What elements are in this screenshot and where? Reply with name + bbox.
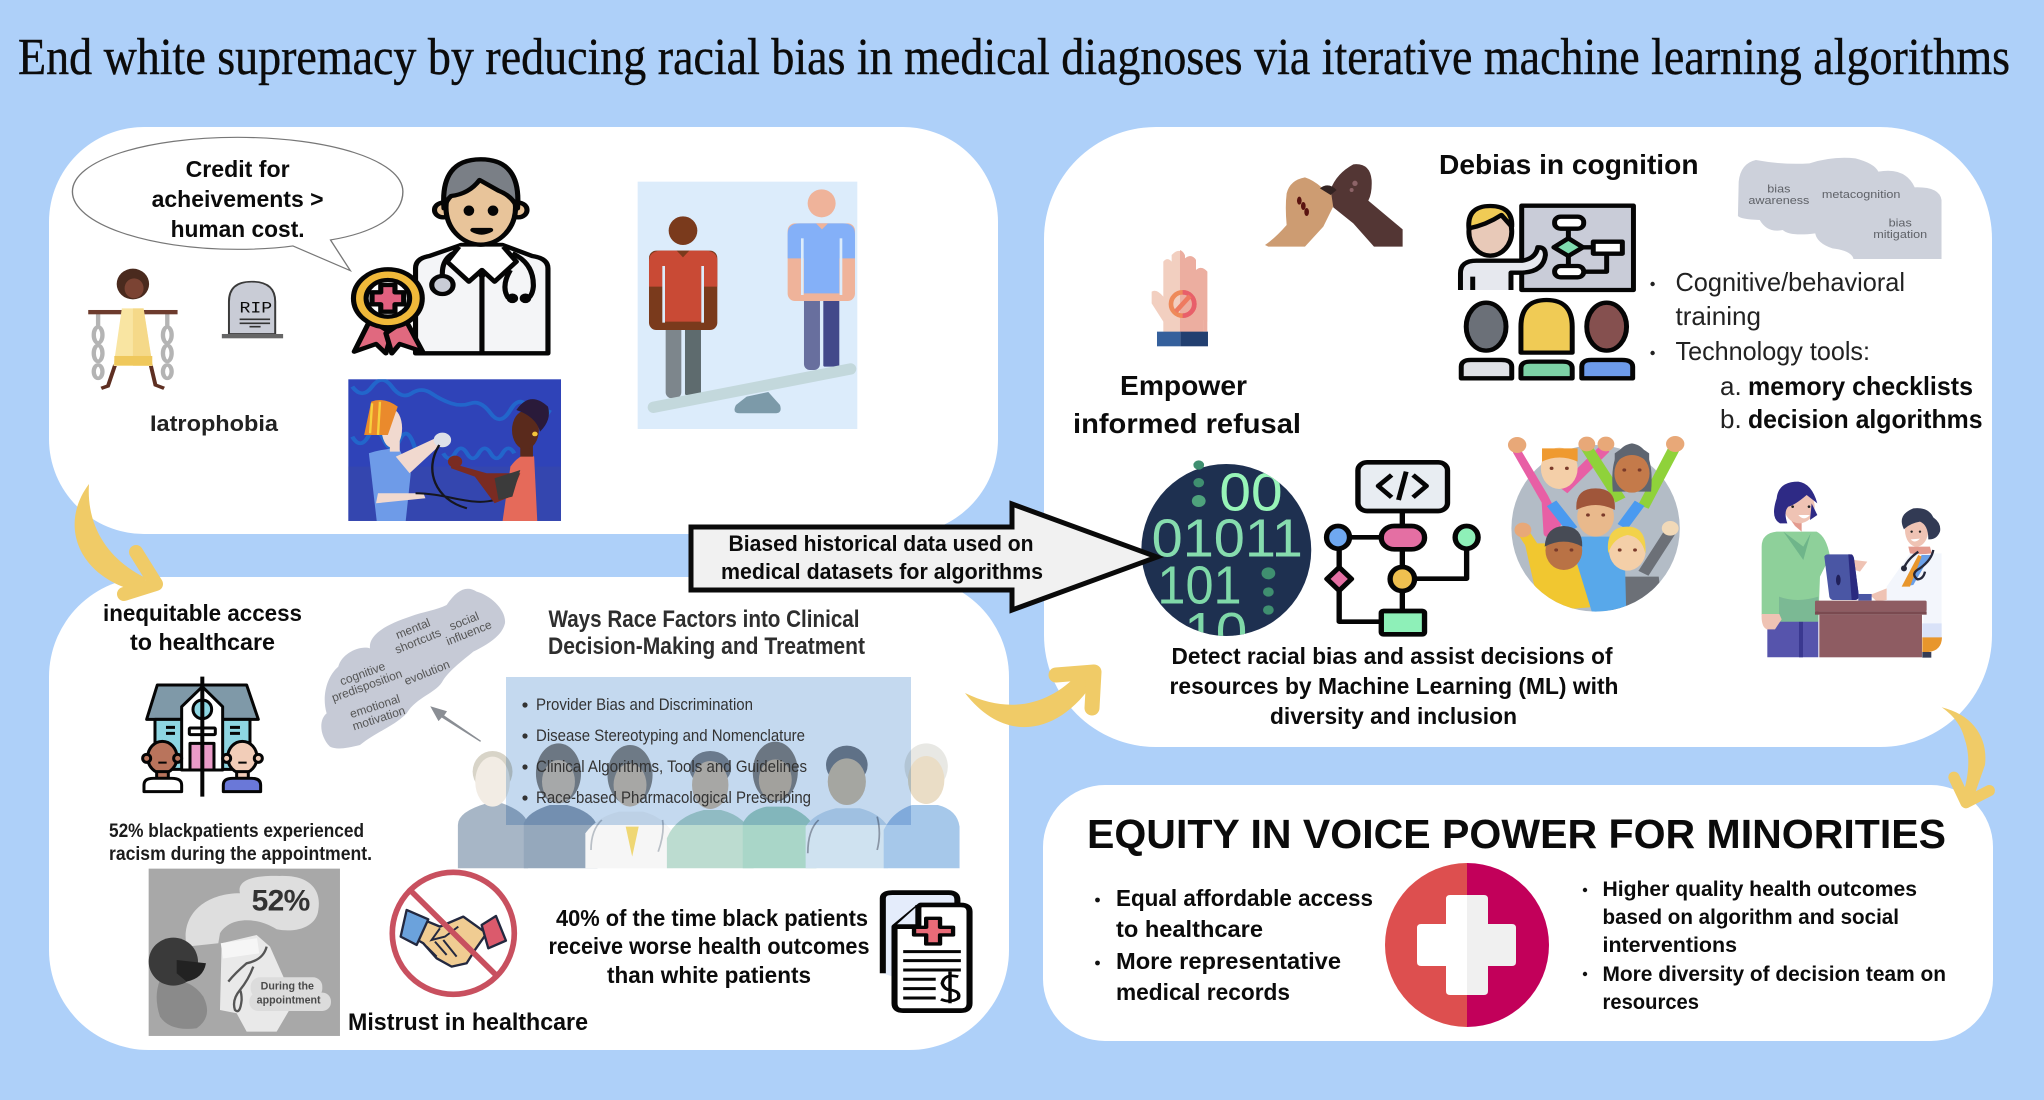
list: race factors: Provider Bias and Discrimination — [536, 696, 753, 714]
list: outcomes and diversity: interventions — [1602, 934, 1737, 957]
heading: debias in cognition: Debias in cognition — [1439, 149, 1698, 180]
word cloud: debiasing concepts: bias — [1767, 182, 1791, 195]
word cloud: cognitive factors — [321, 589, 505, 748]
word cloud: cognitive factors: cognitive — [338, 659, 387, 688]
heading: equity in voice power: EQUITY IN VOICE POWER FOR MINORITIES — [1087, 811, 1946, 857]
panel: inequitable care — [49, 577, 1009, 1050]
caption: detect racial bias: diversity and inclusion — [1270, 703, 1517, 729]
arrow: yellow to machine learning — [965, 672, 1095, 727]
word cloud: debiasing concepts: bias — [1889, 216, 1912, 229]
icon: binary code circle: 101 — [1157, 556, 1242, 615]
list: debias methods: Cognitive/behavioral — [1676, 267, 1905, 297]
speech bubble text: human cost. — [171, 216, 305, 242]
icon: divided hospital with two patients — [143, 677, 262, 797]
word cloud: cognitive factors: shortcuts — [393, 625, 443, 657]
icon: enslaved woman in chains — [88, 269, 178, 388]
list: debias methods: training — [1676, 301, 1761, 331]
icon: algorithm flowchart — [1327, 462, 1478, 634]
stat: 52 percent racism — [109, 820, 372, 865]
icon: presenter teaching audience flowchart — [1460, 206, 1633, 378]
list: race factors — [522, 696, 811, 807]
stat: 40 percent worse outcomes — [548, 905, 870, 988]
panel: historical harm — [49, 127, 998, 534]
label: Iatrophobia: Iatrophobia — [150, 411, 279, 436]
heading: empower informed refusal: informed refusal — [1073, 408, 1301, 439]
speech bubble text: Credit for — [186, 156, 290, 182]
list: access and records — [1095, 885, 1373, 1005]
speech bubble — [72, 137, 403, 271]
arrow: yellow to inequitable access — [75, 484, 156, 594]
heading: ways race factors: Ways Race Factors into Clinical — [548, 606, 860, 633]
word cloud: cognitive factors: evolution — [402, 657, 452, 688]
icon: doctor with award — [353, 159, 548, 353]
icon: binary code circle: 10 — [1184, 603, 1247, 662]
list: debias methods: a. — [1720, 371, 1742, 401]
list: access and records: medical records — [1116, 979, 1290, 1005]
word cloud: debiasing concepts — [1738, 158, 1942, 259]
list: outcomes and diversity: resources — [1602, 991, 1699, 1014]
arrow: biased historical data: medical datasets for algorithms — [721, 559, 1043, 584]
stat: 40 percent worse outcomes: than white patients — [607, 962, 811, 988]
list: debias methods — [1650, 267, 1982, 434]
panel: equity in voice power — [1043, 785, 1993, 1041]
arrow: gray pointer to cloud — [432, 707, 481, 741]
list: debias methods: memory checklists — [1748, 371, 1973, 401]
heading: inequitable access: to healthcare — [130, 629, 275, 655]
word cloud: cognitive factors: social — [447, 609, 481, 633]
heading: inequitable access — [103, 600, 302, 655]
heading: empower informed refusal — [1073, 370, 1301, 439]
icon: hand with no sign — [1152, 250, 1208, 346]
image: seesaw with unequal figures — [638, 182, 857, 429]
icon: diverse cheering crowd — [1508, 436, 1684, 612]
list: outcomes and diversity: based on algorithm and social — [1602, 906, 1899, 929]
word cloud: debiasing concepts: mitigation — [1873, 228, 1927, 241]
label: mistrust in healthcare: Mistrust in healthcare — [348, 1009, 588, 1036]
illustration: patient and doctor at desk — [1762, 482, 1942, 658]
caption: detect racial bias: Detect racial bias and assist decisions of — [1172, 643, 1613, 669]
icon: no handshake — [392, 872, 514, 994]
list: debias methods: Technology tools: — [1676, 336, 1870, 366]
word cloud: cognitive factors: motivation — [351, 703, 407, 733]
image: 52 percent during the appointment: appointment — [257, 994, 321, 1006]
image: 52 percent during the appointment — [149, 869, 340, 1036]
word cloud: cognitive factors: influence — [444, 617, 494, 648]
list: race factors: Disease Stereotyping and Nomenclature — [536, 727, 805, 745]
list: debias methods: b. — [1720, 404, 1742, 434]
icon: tombstone RIP: RIP — [239, 301, 272, 318]
word cloud: cognitive factors: emotional — [348, 692, 402, 721]
arrow: yellow to equity — [1942, 707, 1989, 803]
heading: inequitable access: inequitable access — [103, 600, 302, 626]
icon: tombstone RIP — [222, 282, 283, 338]
list: race factors: Clinical Algorithms, Tools and Guidelines — [536, 758, 807, 776]
speech bubble text: acheivements > — [152, 186, 324, 212]
list: access and records: to healthcare — [1116, 916, 1263, 942]
list: outcomes and diversity: More diversity of decision team on — [1602, 963, 1946, 986]
arrow: biased historical data: Biased historical data used on — [728, 531, 1034, 556]
panel: race factors list background — [506, 677, 911, 825]
list: race factors: Race-based Pharmacological Prescribing — [536, 789, 811, 807]
stat: 40 percent worse outcomes: receive worse health outcomes — [548, 933, 870, 959]
icon: binary code circle — [1141, 460, 1312, 636]
list: outcomes and diversity: Higher quality health outcomes — [1602, 878, 1917, 901]
image: nurse taking patient blood pressure — [348, 379, 561, 522]
image: 52 percent during the appointment: During the — [261, 980, 314, 992]
image: 52 percent during the appointment: 52% — [252, 885, 310, 918]
caption: detect racial bias: resources by Machine Learning (ML) with — [1170, 673, 1618, 699]
list: debias methods: decision algorithms — [1748, 404, 1982, 434]
caption: detect racial bias — [1170, 643, 1618, 729]
word cloud: debiasing concepts: awareness — [1748, 194, 1809, 207]
icon: binary code circle: 00 — [1219, 463, 1283, 523]
icon: pinky promise hands — [1265, 164, 1403, 247]
heading: ways race factors — [548, 606, 865, 660]
list: access and records: More representative — [1116, 948, 1341, 974]
panel: debiasing and machine learning — [691, 127, 1992, 747]
icon: binary code circle: 01011 — [1152, 509, 1303, 569]
arrow: biased historical data — [691, 504, 1157, 610]
speech bubble text — [152, 156, 324, 242]
icon: medical cross circle — [1385, 863, 1549, 1027]
list: outcomes and diversity — [1583, 878, 1946, 1014]
stat: 40 percent worse outcomes: 40% of the time black patients — [556, 905, 868, 931]
word cloud: cognitive factors: predisposition — [330, 666, 404, 705]
word cloud: debiasing concepts: metacognition — [1822, 188, 1900, 201]
word cloud: cognitive factors: mental — [394, 615, 432, 642]
icon: medical bill — [883, 893, 970, 1011]
illustration: clinicians row — [458, 742, 960, 868]
stat: 52 percent racism: racism during the appointment. — [109, 843, 372, 865]
list: access and records: Equal affordable access — [1116, 885, 1373, 911]
heading: ways race factors: Decision-Making and Treatment — [548, 633, 865, 660]
stat: 52 percent racism: 52% blackpatients experienced — [109, 820, 364, 842]
heading: empower informed refusal: Empower — [1120, 370, 1247, 401]
